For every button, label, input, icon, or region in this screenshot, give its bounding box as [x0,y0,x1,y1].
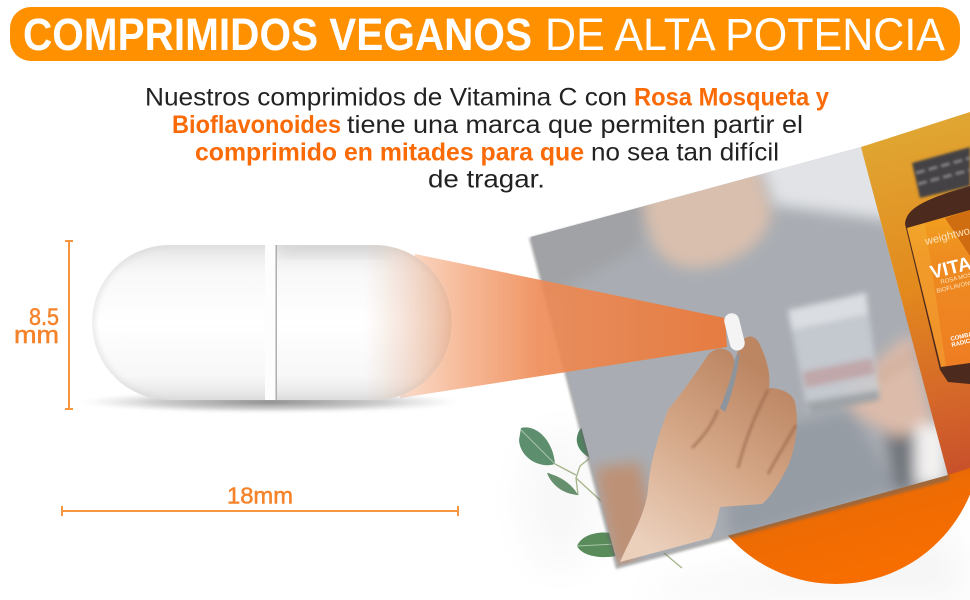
finger creases [692,390,796,474]
width label: 18mm [227,482,293,508]
orange zoom cone [400,254,727,398]
height dimension [14,241,73,409]
intro paragraph [145,84,829,194]
large tablet [92,240,452,400]
height label: mm [14,322,59,349]
intro paragraph: Nuestros comprimidos de Vitamina C con [145,84,627,112]
neck and chest [640,140,772,268]
intro paragraph: de tragar. [428,166,545,194]
tablet [723,312,746,352]
photo backdrop [756,147,882,226]
soft floor shading [520,430,970,600]
title light text: DE ALTA POTENCIA [545,9,945,60]
width dimension [62,482,458,516]
score line [265,245,276,400]
intro paragraph: Bioflavonoides [172,111,341,139]
title bold text: COMPRIMIDOS VEGANOS [23,9,532,60]
intro paragraph: comprimido en mitades para que [195,138,584,166]
intro paragraph: no sea tan difícil [591,138,779,166]
product panel [861,112,970,475]
gap between thumb and index [720,352,740,412]
magazine shadow [529,150,950,569]
supplement bottle [905,147,970,384]
blurred left arm [595,462,652,570]
pill shadow [80,391,460,413]
hand holding tablet [620,312,797,562]
shirt lower shading [720,410,900,540]
intro paragraph: Rosa Mosqueta y [634,84,829,112]
water glass [788,292,880,414]
magazine photo: person holding tablet [531,147,948,566]
intro paragraph: tiene una marca que permiten partir el [347,111,803,139]
blurred right hand [843,334,934,437]
title banner [10,7,960,61]
height label: 8.5 [29,304,59,331]
orange circle behind magazine [691,294,970,584]
eucalyptus leaves [519,427,682,568]
